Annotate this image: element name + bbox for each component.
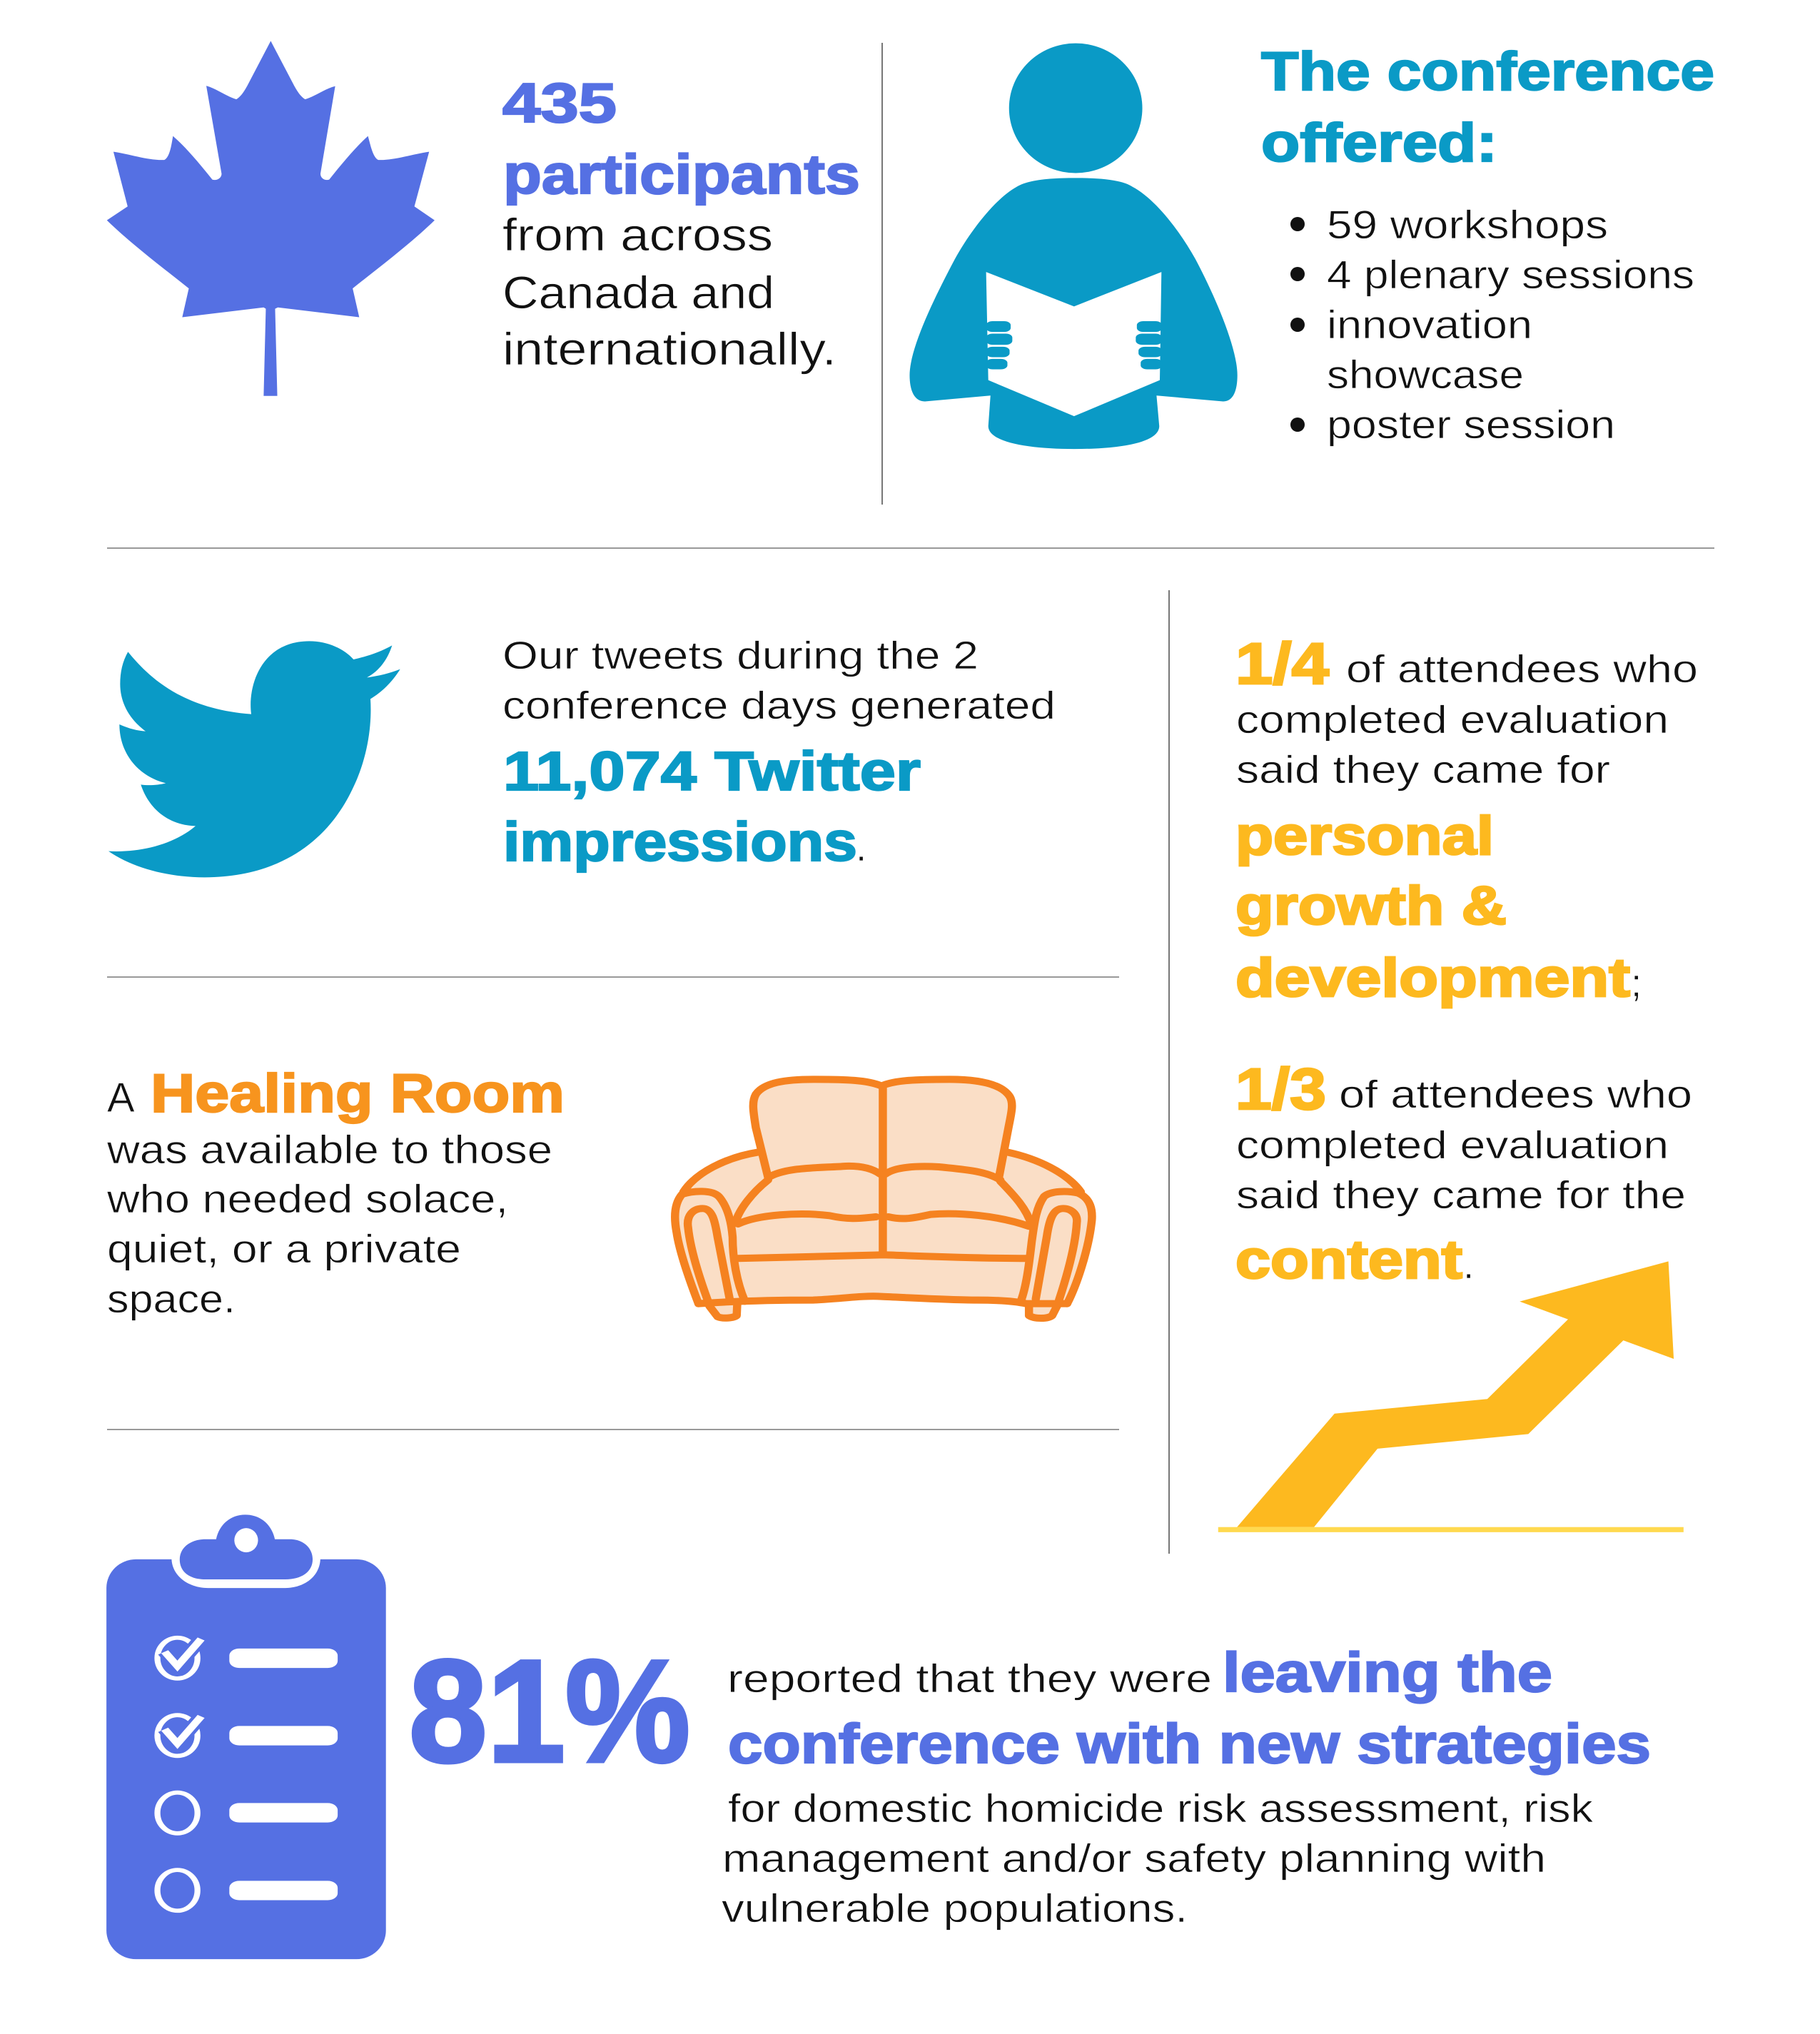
heading: the conference offered: [1261, 41, 1714, 173]
text: 435 participants: from across: [502, 209, 773, 260]
text: healing room: [106, 1063, 565, 1321]
icon: clipboard checklist: [106, 1514, 386, 1959]
text: healing room: quiet, or a private: [107, 1226, 461, 1271]
text: one third content: said they came for the: [1236, 1173, 1686, 1217]
icon: rising arrow: [1218, 1261, 1684, 1532]
text: one quarter personal growth: development: [1235, 948, 1630, 1008]
list: conference offerings: innovation: [1327, 302, 1532, 347]
text: healing room: space.: [107, 1276, 236, 1321]
list: conference offerings: [1290, 202, 1694, 447]
text: leaving with new strategies: leaving the: [1223, 1641, 1552, 1704]
icon: twitter bird: [108, 641, 400, 877]
text: one third content: 1/3: [1235, 1057, 1326, 1122]
text: one quarter personal growth: of attendees who: [1346, 647, 1698, 691]
text: one third content: [1235, 1057, 1692, 1290]
text: twitter impressions: impressions: [503, 811, 857, 873]
text: leaving with new strategies: [722, 1641, 1651, 1931]
text: 435 participants: 435: [502, 71, 617, 134]
icon: person reading: [909, 44, 1238, 449]
text: one third content: .: [1463, 1243, 1474, 1287]
text: twitter impressions: Our tweets during the 2: [502, 633, 979, 677]
text: leaving with new strategies: reported that they were: [727, 1656, 1212, 1701]
text: one third content: of attendees who: [1339, 1072, 1692, 1116]
text: healing room: A: [107, 1075, 135, 1121]
text: 435 participants: participants: [503, 143, 860, 206]
heading: the conference offered: offered:: [1261, 113, 1497, 173]
text: healing room: was available to those: [106, 1127, 552, 1172]
text: healing room: who needed solace,: [106, 1176, 508, 1221]
text: 435 participants: [502, 71, 860, 375]
text: leaving with new strategies: management and/or safety planning with: [722, 1836, 1546, 1881]
text: twitter impressions: [502, 633, 1056, 873]
icon: maple leaf: [107, 41, 435, 396]
text: leaving with new strategies: conference with new strategies: [728, 1712, 1651, 1775]
text: one third content: content: [1235, 1230, 1462, 1290]
text: 435 participants: internationally.: [502, 323, 836, 375]
list: conference offerings: 59 workshops: [1327, 202, 1608, 247]
list: conference offerings: poster session: [1327, 402, 1615, 447]
text: one quarter personal growth: said they came for: [1236, 747, 1610, 791]
text: healing room: Healing Room: [151, 1063, 565, 1124]
text: twitter impressions: conference days generated: [502, 683, 1056, 727]
list: conference offerings: showcase: [1327, 352, 1524, 397]
text: one quarter personal growth: 1/4: [1235, 632, 1329, 697]
text: 435 participants: Canada and: [502, 267, 774, 318]
text: twitter impressions: .: [856, 825, 866, 869]
text: leaving with new strategies: for domestic homicide risk assessment, risk: [728, 1786, 1594, 1831]
text: one quarter personal growth: completed evaluation: [1236, 697, 1669, 742]
text: leaving with new strategies: vulnerable populations.: [722, 1886, 1188, 1931]
list: conference offerings: 4 plenary sessions: [1327, 252, 1694, 297]
stat: 81 percent: 81%: [409, 1630, 690, 1793]
icon: couch: [675, 1079, 1092, 1318]
text: one quarter personal growth: growth &: [1235, 876, 1507, 936]
text: twitter impressions: 11,074 Twitter: [503, 741, 921, 802]
heading: the conference offered: The conference: [1261, 41, 1714, 102]
text: one third content: completed evaluation: [1236, 1123, 1669, 1167]
text: one quarter personal growth: [1235, 632, 1698, 1008]
text: one quarter personal growth: ;: [1631, 961, 1642, 1005]
text: one quarter personal growth: personal: [1235, 806, 1494, 866]
